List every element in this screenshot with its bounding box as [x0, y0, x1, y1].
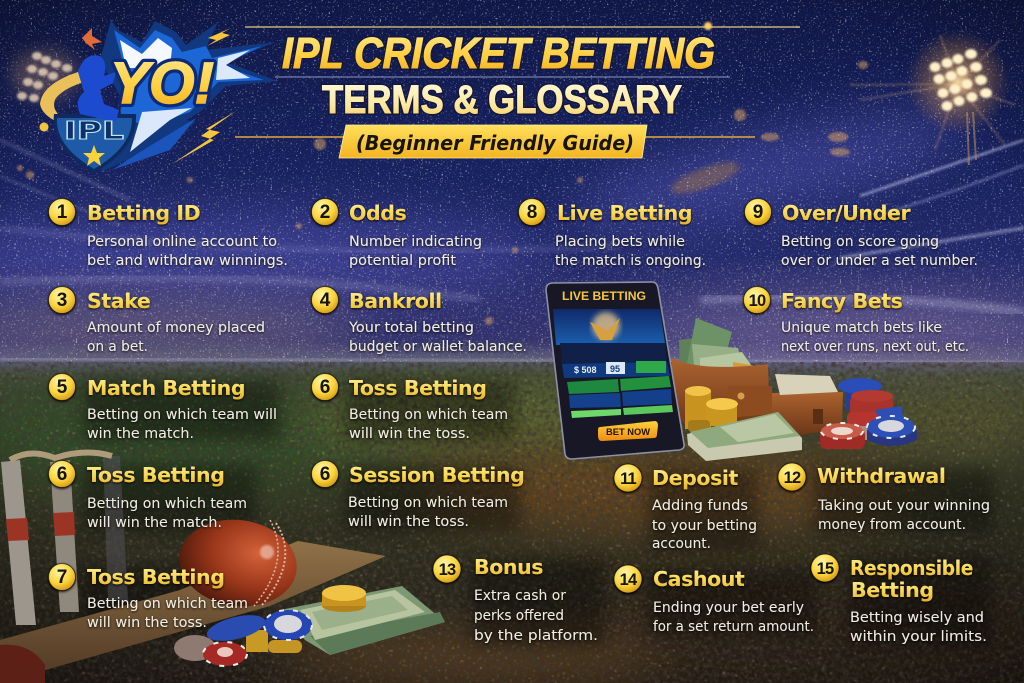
- entry 15: Responsible Betting: 15: [817, 560, 834, 578]
- entry 6: Toss Betting, match: [48, 460, 247, 531]
- phone bet now button: BET NOW: [606, 427, 650, 438]
- entry 5: Match Betting: 5: [57, 377, 68, 398]
- decorative title rules: [235, 22, 800, 137]
- entry 13: Bonus: perks offered: [474, 608, 564, 624]
- phone body: [546, 282, 684, 459]
- title: [282, 29, 715, 122]
- entry 13: Bonus: by the platform.: [474, 628, 598, 644]
- entry 4: Bankroll: 4: [320, 290, 331, 311]
- entry 10: Fancy Bets: next over runs, next out, etc.: [781, 339, 969, 355]
- entry 3: Stake: 3: [57, 290, 67, 311]
- phone hero: [553, 309, 665, 345]
- icon: brown wallet: [672, 358, 770, 430]
- icon: second wallet: [772, 392, 843, 436]
- entry 13: Bonus: 13: [439, 561, 456, 579]
- entry 11: Deposit: to your betting: [652, 518, 757, 534]
- entry 7: Toss Betting: Betting on which team: [87, 596, 248, 612]
- entry 8: Live Betting: the match is ongoing.: [555, 253, 706, 269]
- title: IPL CRICKET BETTING: [282, 29, 715, 78]
- logo: YO! IPL shield with batsman: IPL: [64, 116, 124, 145]
- entry 6: Toss Betting, match: 6: [57, 464, 67, 485]
- entry 7: Toss Betting: [48, 564, 248, 631]
- icon: star: [83, 145, 105, 166]
- entry 15: Responsible Betting: Responsible: [850, 556, 973, 580]
- entry 7: Toss Betting: will win the toss.: [87, 615, 207, 631]
- illustration: cricket stumps, bat, ball, chips: [0, 452, 445, 683]
- entry 1: Betting ID: Betting ID: [87, 201, 200, 225]
- phone odds rows: 95: [610, 364, 620, 374]
- entry 8: Live Betting: Live Betting: [557, 201, 692, 225]
- entry 6: Session Betting: 6: [320, 464, 330, 485]
- entry 14: Cashout: 14: [620, 571, 638, 589]
- entry 14: Cashout: for a set return amount.: [653, 619, 814, 635]
- icon: gold swoosh: [40, 72, 92, 124]
- entry 3: Stake: Amount of money placed: [87, 320, 265, 336]
- entry 5: Match Betting: win the match.: [87, 426, 194, 442]
- entry 11: Deposit: Deposit: [652, 466, 739, 490]
- subtitle pill: (Beginner Friendly Guide): [356, 131, 634, 155]
- title: IPL CRICKET BETTING: [282, 29, 715, 78]
- floodlight: left: [11, 49, 79, 102]
- entry 12: Withdrawal: [778, 463, 990, 533]
- icon: poker chip stacks: [846, 382, 860, 410]
- phone bet now button: [598, 421, 658, 441]
- entry 4: Bankroll: Your total betting: [348, 320, 474, 336]
- entry 12: Withdrawal: money from account.: [818, 517, 966, 533]
- icon: poker chips: [204, 610, 268, 646]
- entry 4: Bankroll: Bankroll: [349, 289, 442, 313]
- entry 15: Responsible Betting: Betting: [851, 578, 934, 602]
- entry 10: Fancy Bets: 10: [749, 292, 766, 310]
- entry 6: Toss Betting, match: will win the match.: [87, 515, 222, 531]
- entry 8: Live Betting: [518, 198, 706, 269]
- entry 15: Responsible Betting: Betting wisely and: [850, 610, 984, 626]
- entry 2: Odds: potential profit: [349, 253, 457, 269]
- glossary entries: [48, 198, 990, 645]
- entry 2: Odds: 2: [320, 202, 330, 223]
- entry 10: Fancy Bets: Fancy Bets: [781, 289, 903, 313]
- phone odds rows: [560, 343, 673, 418]
- entry 15: Responsible Betting: [811, 554, 987, 645]
- icon: coin stacks: [685, 391, 711, 429]
- entry 6: Session Betting: Betting on which team: [348, 495, 508, 511]
- icon: cash in wallet: [679, 338, 697, 372]
- icon: stumps: [103, 456, 128, 600]
- entry 6: Session Betting: will win the toss.: [348, 514, 469, 530]
- entry 9: Over/Under: Betting on score going: [781, 234, 939, 250]
- subtitle pill: [339, 125, 647, 158]
- entry 5: Match Betting: Match Betting: [87, 376, 245, 400]
- entry 14: Cashout: Ending your bet early: [653, 600, 804, 616]
- entry 1: Betting ID: [48, 198, 288, 269]
- icon: cash stack: [687, 412, 802, 461]
- title: TERMS & GLOSSARY: [322, 78, 682, 122]
- entry 5: Match Betting: [48, 374, 277, 442]
- entry 9: Over/Under: Over/Under: [782, 201, 912, 225]
- entry 4: Bankroll: [312, 286, 527, 355]
- entry 8: Live Betting: Placing bets while: [555, 234, 685, 250]
- phone odds rows: $ 508: [574, 365, 597, 375]
- floodlight: right: [850, 30, 1015, 165]
- entry 3: Stake: on a bet.: [87, 339, 148, 355]
- entry 3: Stake: [48, 286, 265, 355]
- logo: YO! IPL shield with batsman: [40, 20, 278, 173]
- entry 3: Stake: Stake: [87, 289, 150, 313]
- phone header text: LIVE BETTING: [562, 291, 646, 303]
- entry 9: Over/Under: 9: [753, 202, 763, 223]
- entry 6: Session Betting: Session Betting: [349, 463, 524, 487]
- entry 13: Bonus: Bonus: [474, 555, 543, 579]
- entry 8: Live Betting: 8: [527, 202, 537, 223]
- entry 2: Odds: [312, 198, 482, 269]
- entry 15: Responsible Betting: within your limits.: [850, 629, 987, 645]
- icon: blue burst: [100, 20, 278, 172]
- entry 1: Betting ID: Personal online account to: [87, 234, 277, 250]
- entry 6: Toss Betting: will win the toss.: [349, 426, 470, 442]
- title: TERMS & GLOSSARY: [322, 78, 682, 122]
- entry 9: Over/Under: [744, 198, 978, 269]
- icon: cricket ball: [174, 512, 302, 614]
- entry 13: Bonus: Extra cash or: [474, 588, 566, 604]
- entry 5: Match Betting: Betting on which team will: [87, 407, 277, 423]
- entry 11: Deposit: Adding funds: [652, 498, 748, 514]
- icon: lightning bolts: [172, 111, 236, 164]
- entry 2: Odds: Odds: [349, 201, 407, 225]
- entry 6: Toss Betting: Betting on which team: [349, 407, 508, 423]
- entry 11: Deposit: account.: [652, 536, 711, 552]
- entry 6: Toss Betting, match: Toss Betting: [87, 463, 225, 487]
- entry 6: Toss Betting: [312, 374, 508, 442]
- entry 1: Betting ID: 1: [57, 202, 68, 223]
- entry 6: Toss Betting: Toss Betting: [349, 376, 487, 400]
- entry 11: Deposit: [614, 464, 757, 552]
- entry 4: Bankroll: budget or wallet balance.: [349, 339, 527, 355]
- entry 7: Toss Betting: 7: [57, 567, 67, 588]
- entry 6: Toss Betting: 6: [320, 377, 330, 398]
- entry 14: Cashout: Cashout: [653, 567, 745, 591]
- logo wordmark: YO!: [110, 51, 214, 116]
- entry 13: Bonus: [433, 555, 598, 644]
- icon: gold coins: [322, 600, 366, 612]
- entry 12: Withdrawal: Withdrawal: [817, 464, 945, 488]
- entry 9: Over/Under: over or under a set number.: [781, 253, 978, 269]
- entry 6: Toss Betting, match: Betting on which team: [87, 496, 247, 512]
- entry 1: Betting ID: bet and withdraw winnings.: [87, 253, 288, 269]
- entry 12: Withdrawal: 12: [784, 469, 801, 487]
- icon: banknotes: [280, 586, 445, 655]
- entry 2: Odds: Number indicating: [349, 234, 482, 250]
- entry 6: Session Betting: [312, 460, 524, 530]
- entry 7: Toss Betting: Toss Betting: [87, 565, 225, 589]
- illustration: wallets, cash and chips: [672, 318, 917, 461]
- entry 11: Deposit: 11: [620, 470, 637, 488]
- entry 10: Fancy Bets: [744, 286, 969, 355]
- icon: bat: [0, 541, 386, 683]
- illustration: phone showing live betting: [546, 282, 684, 459]
- entry 14: Cashout: [614, 565, 814, 635]
- icon: shield: [54, 114, 136, 173]
- logo: YO! IPL shield with batsman: YO!: [110, 51, 214, 116]
- icon: batsman: [78, 55, 119, 122]
- entry 12: Withdrawal: Taking out your winning: [817, 498, 990, 514]
- entry 10: Fancy Bets: Unique match bets like: [781, 320, 942, 336]
